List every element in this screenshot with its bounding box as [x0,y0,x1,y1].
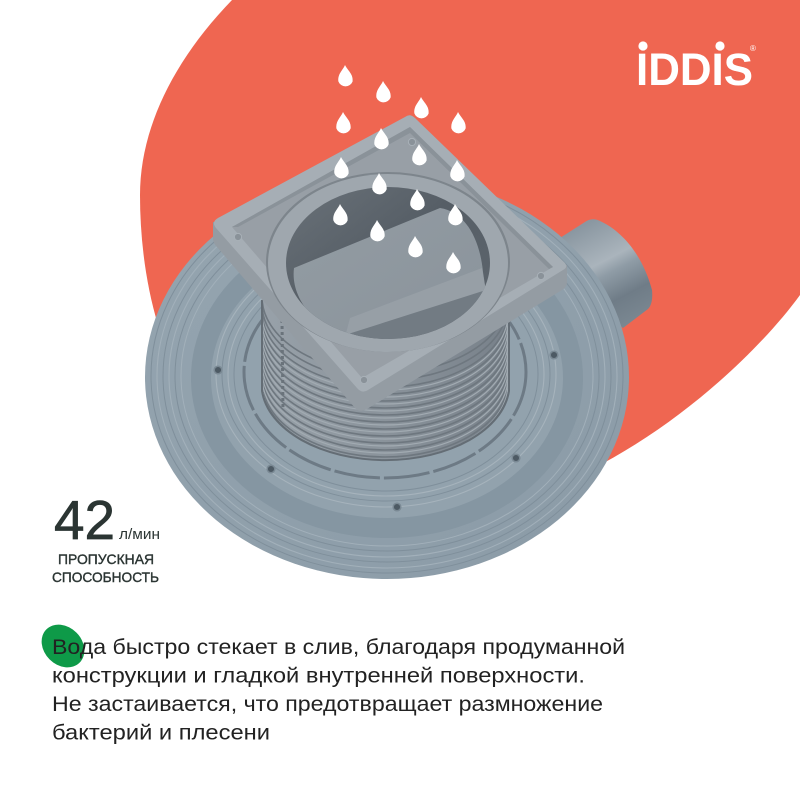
logo: IDDIS: IDDIS [636,44,753,95]
corner pins [234,138,545,384]
description paragraph: конструкции и гладкой внутренней поверхности. [52,664,585,688]
stat: 42 l/min throughput: СПОСОБНОСТЬ [52,569,159,585]
description paragraph: Вода быстро стекает в слив, благодаря продуманной [52,635,625,659]
product: floor drain [145,115,652,579]
stat: 42 l/min throughput: 42 [54,489,115,551]
description paragraph [52,635,625,744]
ribbed cylinder body [261,300,510,462]
water drops [333,65,466,273]
inner water seal block [294,208,486,337]
side outlet pipe [552,219,652,328]
flange mounting holes [214,351,558,511]
logo: IDDIS: ® [750,44,756,53]
square plate [213,115,567,411]
coral background shape [140,0,800,494]
description paragraph: бактерий и плесени [52,720,270,744]
green accent blob [33,616,93,676]
description paragraph: Не застаивается, что предотвращает размножение [52,692,603,716]
round flange with grooves [145,175,629,579]
round ring and drain opening [266,172,510,352]
stat: 42 l/min throughput: ПРОПУСКНАЯ [58,551,154,567]
stat: 42 l/min throughput: л/мин [119,526,160,543]
stat: 42 l/min throughput [52,489,160,585]
